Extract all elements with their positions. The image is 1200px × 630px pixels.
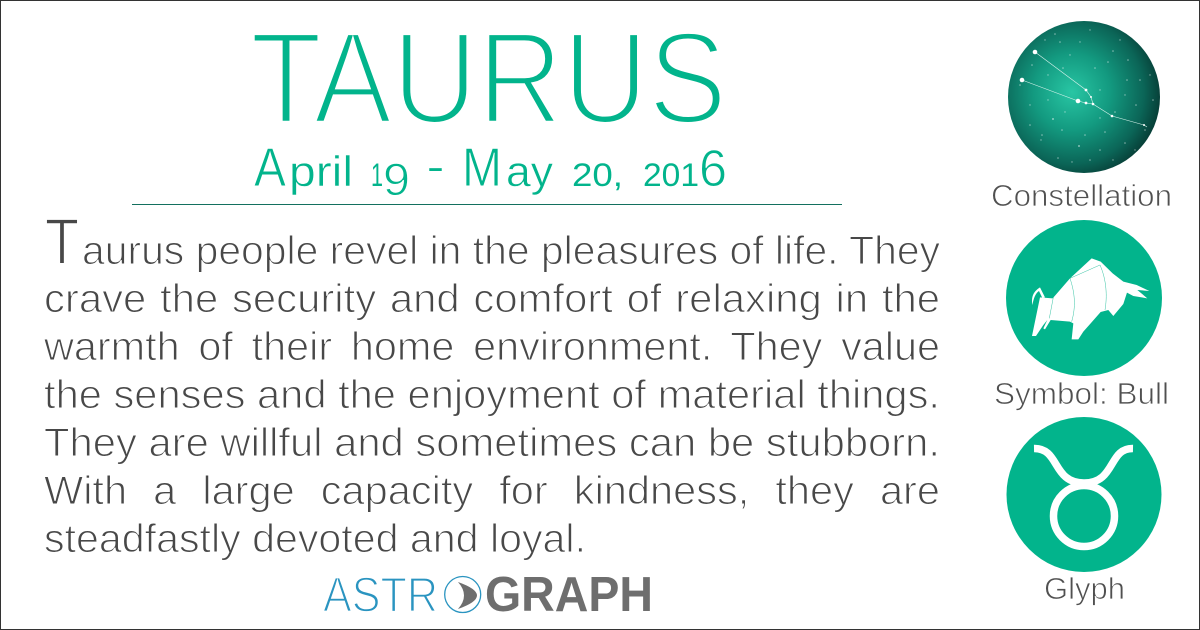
date range: 6 — [699, 140, 727, 198]
date range: A — [254, 136, 286, 198]
description text: They are willful and sometimes can be stubborn. — [44, 421, 940, 465]
date range: pril — [289, 148, 353, 196]
logo: Astrograph: GRAPH — [485, 568, 653, 622]
heading rule — [132, 204, 842, 205]
date range: 9 — [383, 154, 410, 205]
description text: warmth of their home environment. They value — [43, 325, 940, 369]
label: glyph: Glyph — [1044, 571, 1125, 606]
logo: Astrograph — [323, 568, 653, 622]
icon: constellation — [1008, 21, 1160, 173]
description text — [43, 205, 940, 561]
description text: crave the security and comfort of relaxing in the — [44, 277, 940, 321]
logo: Astrograph: ASTR — [323, 568, 438, 622]
date range: M — [462, 136, 502, 198]
date range: - — [427, 146, 444, 187]
description text: steadfastly devoted and loyal. — [44, 517, 586, 561]
title: TAURUS — [250, 4, 727, 151]
description text: the senses and the enjoyment of material things. — [44, 373, 940, 417]
description text: aurus people revel in the pleasures of life. They — [82, 229, 940, 273]
date range: 20, — [572, 157, 623, 193]
date range — [254, 136, 727, 205]
date range: 201 — [643, 157, 699, 193]
date range: 1 — [371, 157, 383, 193]
description text: With a large capacity for kindness, they are — [44, 469, 940, 513]
icon: Taurus glyph — [1006, 417, 1162, 572]
label: constellation: Constellation — [991, 178, 1172, 213]
date range: ay — [506, 148, 554, 196]
label: symbol: Symbol: Bull — [994, 376, 1169, 411]
description text: T — [45, 205, 79, 278]
icon: bull — [1006, 220, 1162, 376]
